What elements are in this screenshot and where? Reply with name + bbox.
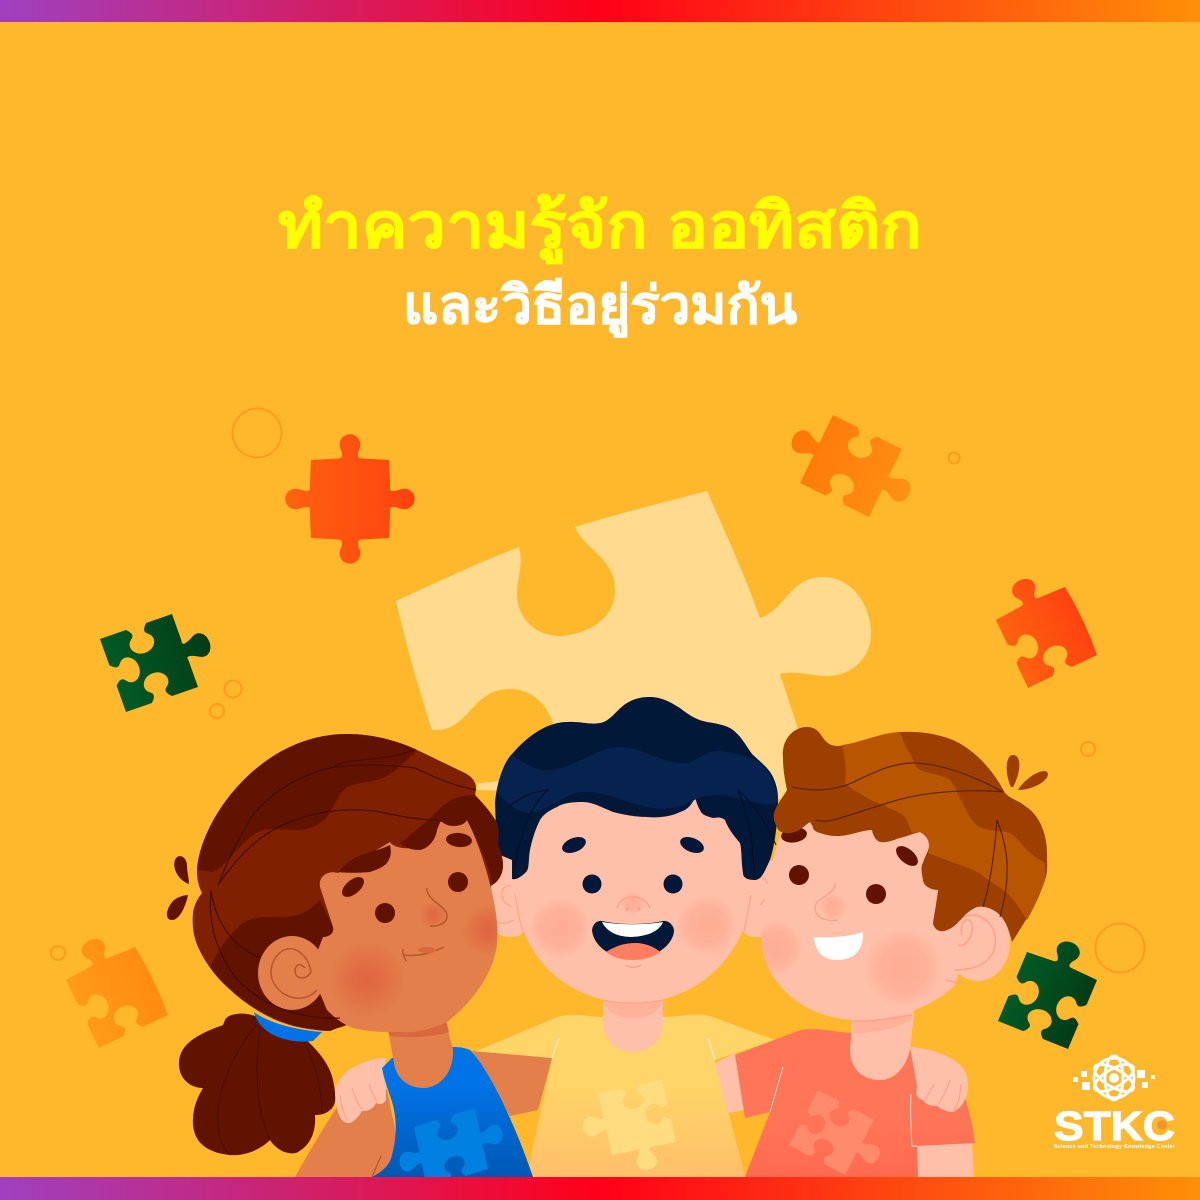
puzzle piece: red-orange top left	[285, 434, 415, 564]
forearm behind center boy	[715, 1053, 745, 1113]
child: center boy	[474, 697, 778, 1180]
left brow under hair	[780, 826, 808, 844]
center boy hand on shoulder	[335, 1058, 386, 1123]
puzzle piece: orange top right	[777, 403, 925, 529]
shirt: coral	[735, 1029, 975, 1177]
hair	[774, 727, 1047, 942]
shirt puzzle emblem	[789, 1090, 893, 1185]
nose	[617, 897, 650, 908]
hand on shoulder	[910, 1047, 968, 1112]
hair base	[193, 734, 503, 1030]
face	[762, 810, 985, 1020]
smile	[403, 947, 444, 961]
top gradient bar	[0, 0, 1200, 22]
shirt puzzle emblem	[576, 1080, 681, 1180]
ears	[492, 856, 528, 937]
hair	[495, 697, 778, 880]
ear	[258, 936, 326, 1010]
ponytail	[179, 1014, 335, 1155]
puzzle piece: green left	[100, 606, 222, 712]
blue top	[372, 1047, 533, 1177]
puzzle piece: red-orange right	[985, 563, 1099, 688]
hair drops	[1007, 755, 1019, 787]
child: right boy	[715, 727, 1048, 1185]
title	[278, 192, 922, 338]
cheeks	[529, 897, 591, 959]
lower arm	[917, 1140, 974, 1177]
ear	[946, 905, 1010, 981]
cheeks	[762, 896, 936, 1000]
face	[515, 780, 753, 1003]
neck	[388, 1018, 453, 1088]
hair fringe strands	[338, 845, 391, 873]
shirt: yellow	[474, 1014, 775, 1177]
decorative rings	[51, 408, 1144, 972]
face	[310, 820, 497, 1032]
right brow and eyes	[893, 842, 921, 870]
logo wordmark: STKC	[1054, 1103, 1175, 1149]
nose	[427, 888, 447, 926]
logo pixel squares	[1073, 1070, 1155, 1090]
title: ทำความรู้จัก ออทิสติก	[278, 192, 922, 264]
logo atom icon	[1090, 1056, 1138, 1100]
smile	[814, 932, 863, 960]
neck	[850, 1005, 915, 1080]
puzzle piece: orange bottom left	[55, 923, 170, 1048]
puzzle piece: green bottom right	[998, 929, 1107, 1049]
large pale puzzle piece	[396, 491, 871, 800]
neck	[603, 995, 663, 1052]
hair tie	[254, 1012, 322, 1042]
right arm across center boy	[472, 1051, 552, 1116]
logo tagline: Science and Technology Knowledge Center	[1054, 1144, 1176, 1150]
left arm	[295, 1090, 405, 1177]
brows and eyes	[339, 873, 367, 901]
child: girl	[167, 734, 552, 1194]
bottom gradient bar	[0, 1177, 1200, 1200]
open mouth	[592, 921, 674, 959]
drops beside hair	[174, 856, 189, 884]
cheeks	[339, 906, 498, 1008]
title: และวิธีอยู่ร่วมกัน	[403, 277, 797, 338]
brows and eyes	[560, 834, 588, 856]
hair shading	[197, 734, 417, 872]
nose	[815, 883, 838, 920]
logo: STKC	[1054, 1056, 1176, 1150]
